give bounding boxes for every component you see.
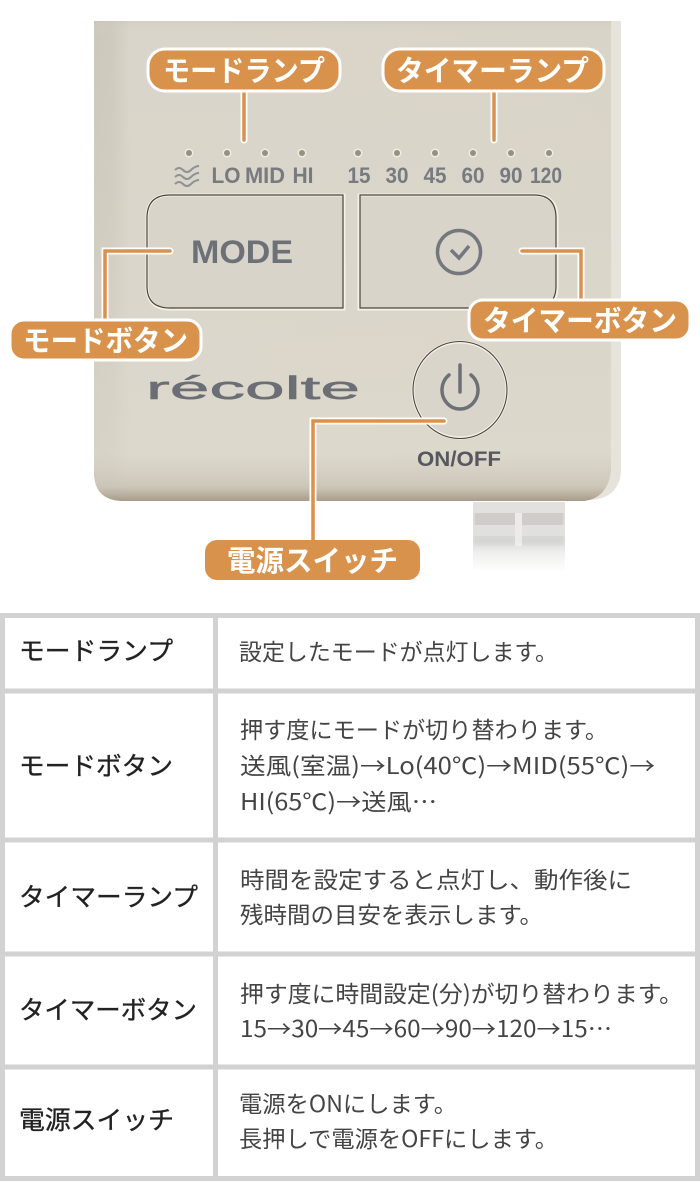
row: mode button: 送風(室温)→Lo(40℃)→MID(55℃)→ [240,747,655,781]
row: timer lamp: タイマーランプ [19,877,198,914]
mode button: MODE [191,234,293,270]
leader line: mode button [105,251,170,322]
timer lamps: 30 [386,163,408,188]
leader line: mode lamp [240,90,248,140]
row: timer button: タイマーボタン [19,990,197,1027]
leader line: power switch [313,421,444,542]
timer lamps: 60 [462,163,484,188]
table grid [0,613,700,1181]
leader line: timer button [522,251,581,302]
timer lamps [348,148,562,188]
row: mode lamp: 設定したモードが点灯します。 [239,633,558,667]
callout: mode button: モードボタン [23,318,188,360]
timer lamps: 45 [424,163,446,188]
row: power switch [19,1085,558,1154]
row: timer button: 15→30→45→60→90→120→15… [240,1010,612,1044]
row: mode lamp [19,631,558,668]
row: mode button: 押す度にモードが切り替わります。 [240,711,608,745]
leader line: timer lamp [490,90,498,140]
timer lamps: 90 [500,163,522,188]
row: timer lamp: 時間を設定すると点灯し、動作後に [240,861,632,895]
mode lamps: HI [292,163,314,188]
row: power switch: 長押しで電源をOFFにします。 [239,1120,558,1154]
cable strain relief [473,502,565,572]
callout: timer button: タイマーボタン [483,298,677,340]
row: power switch: 電源をONにします。 [239,1085,457,1119]
mode lamps [175,148,314,188]
callout: timer lamp: タイマーランプ [396,48,589,90]
row: mode lamp: モードランプ [19,631,173,668]
ON/OFF label: ON/OFF [417,448,501,471]
remote control panel body [94,21,621,501]
timer button [359,195,557,309]
row: power switch: 電源スイッチ [19,1100,174,1137]
row: timer lamp [19,861,632,930]
row: timer button: 押す度に時間設定(分)が切り替わります。 [240,975,683,1009]
timer lamps: 15 [348,163,370,188]
row: timer lamp: 残時間の目安を表示します。 [240,896,543,930]
mode lamps: LO [212,163,240,188]
row: timer button [19,975,683,1044]
callout: mode lamp: モードランプ [163,48,325,90]
description table [0,613,700,1181]
row: mode button: HI(65℃)→送風… [240,783,437,817]
brand logo: récolte [146,370,360,406]
mode button [147,195,344,309]
row: mode button [19,711,655,817]
power button [413,342,507,438]
row: mode button: モードボタン [19,746,173,783]
callout: power switch: 電源スイッチ [227,538,398,580]
timer lamps: 120 [530,163,562,188]
mode lamps: MID [245,163,285,188]
